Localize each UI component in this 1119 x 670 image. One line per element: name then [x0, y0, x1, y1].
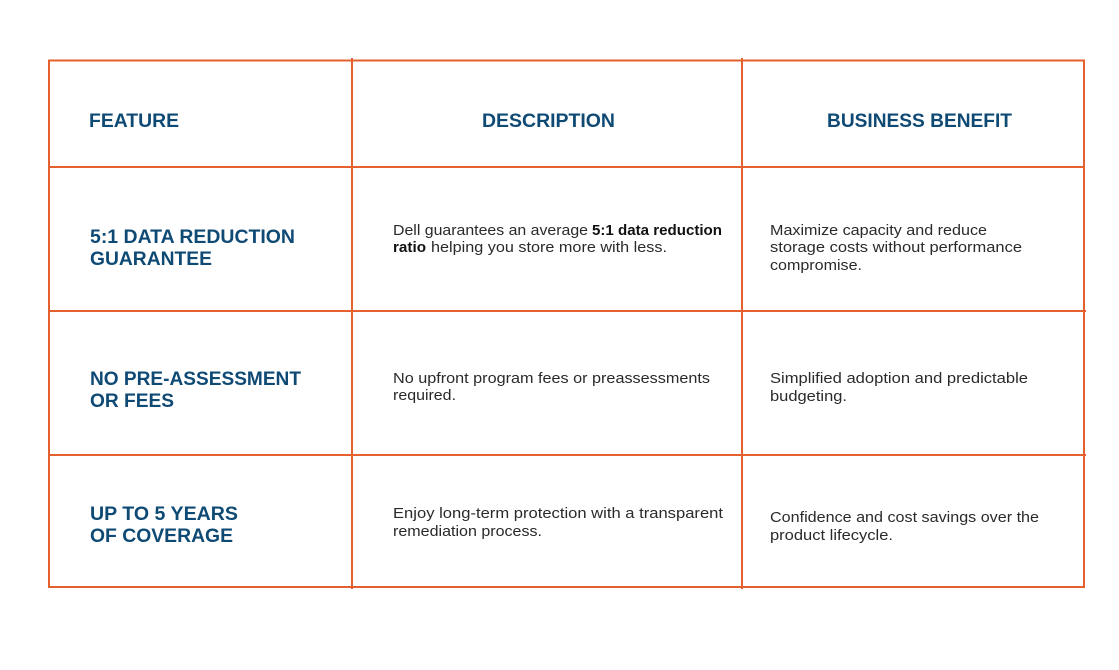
business benefit text — [770, 370, 1028, 405]
business benefit text: Simplified adoption and predictable — [770, 370, 1028, 387]
business benefit text: storage costs without performance — [770, 239, 1022, 256]
feature name: OF COVERAGE — [90, 526, 233, 547]
description text: remediation process. — [393, 523, 542, 540]
header row — [89, 111, 1012, 132]
description text: ratio — [393, 239, 426, 256]
business benefit text — [770, 222, 1022, 274]
feature name — [90, 369, 301, 412]
business benefit text: budgeting. — [770, 388, 847, 405]
feature name: GUARANTEE — [90, 249, 212, 270]
business benefit text: product lifecycle. — [770, 527, 893, 544]
description text: 5:1 data reduction — [592, 222, 722, 239]
table grid — [49, 58, 1086, 589]
business benefit text — [770, 509, 1039, 544]
business benefit text: Confidence and cost savings over the — [770, 509, 1039, 526]
feature name — [90, 227, 295, 270]
description text: helping you store more with less. — [431, 239, 667, 256]
description text — [393, 222, 722, 256]
business benefit text: Maximize capacity and reduce — [770, 222, 987, 239]
feature name: UP TO 5 YEARS — [90, 504, 238, 525]
row: no pre-assessment or fees — [90, 369, 1028, 412]
business benefit text: compromise. — [770, 257, 862, 274]
feature name — [90, 504, 238, 547]
description text: No upfront program fees or preassessments — [393, 370, 710, 387]
heading: business benefit: BUSINESS BENEFIT — [827, 111, 1012, 132]
heading: description: DESCRIPTION — [482, 111, 615, 132]
description text: required. — [393, 387, 456, 404]
heading: feature: FEATURE — [89, 111, 179, 132]
feature name: 5:1 DATA REDUCTION — [90, 227, 295, 248]
description text — [393, 505, 724, 540]
feature name: OR FEES — [90, 391, 174, 412]
description text — [393, 370, 710, 404]
description text: Enjoy long-term protection with a transparent — [393, 505, 724, 522]
row: up to 5 years of coverage — [90, 504, 1039, 547]
feature name: NO PRE-ASSESSMENT — [90, 369, 301, 390]
row: 5:1 data reduction guarantee — [90, 222, 1022, 274]
description text: Dell guarantees an average — [393, 222, 588, 239]
